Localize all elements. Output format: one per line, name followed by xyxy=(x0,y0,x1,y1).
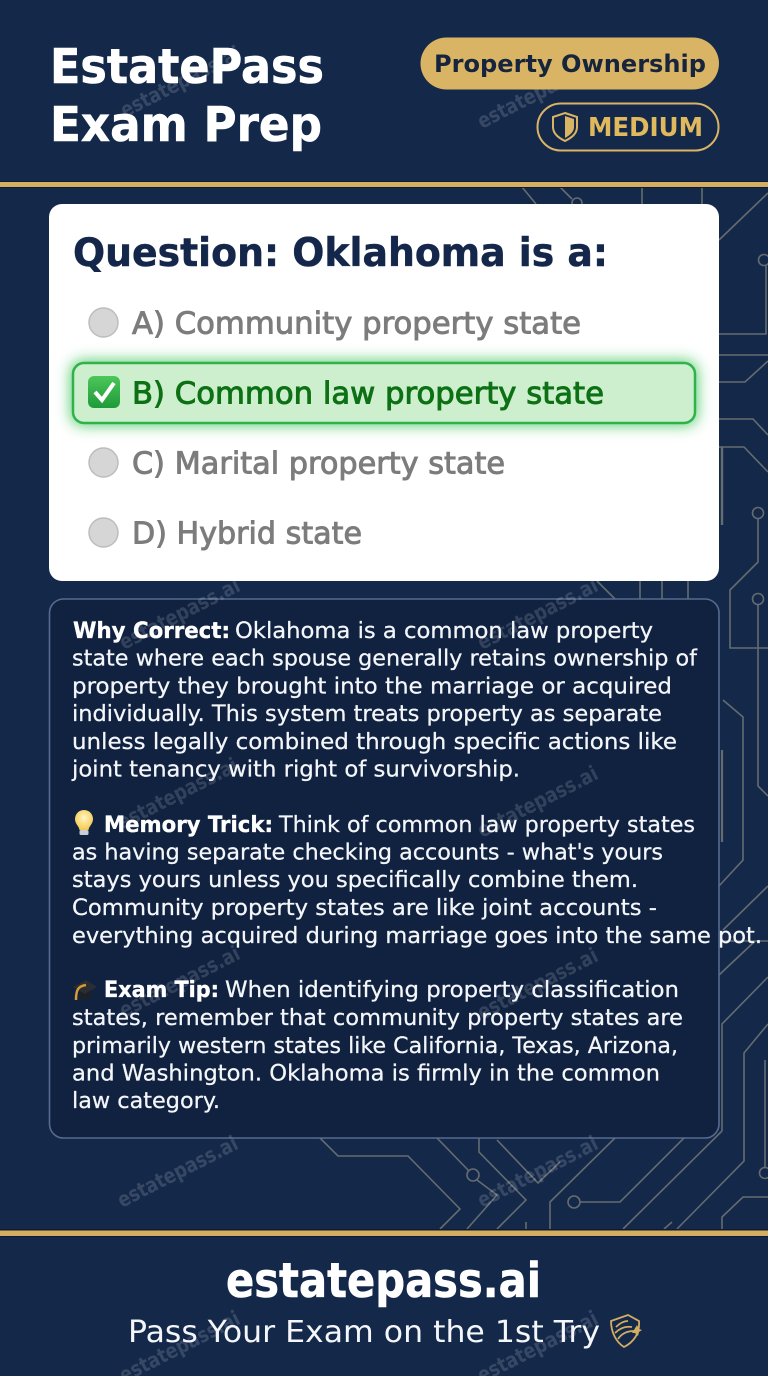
why correct text: state where each spouse generally retains ownership of xyxy=(72,646,698,672)
title xyxy=(50,39,324,153)
difficulty badge: MEDIUM xyxy=(588,113,703,143)
why correct text: unless legally combined through specific actions like xyxy=(72,729,677,755)
exam tip text: Exam Tip: xyxy=(104,977,219,1003)
option C: C) Marital property state xyxy=(132,446,505,482)
memory trick text: as having separate checking accounts - what's yours xyxy=(72,840,663,866)
watermarks: estatepass.ai xyxy=(473,52,602,133)
memory trick text: Memory Trick: xyxy=(104,812,273,838)
question card xyxy=(49,204,719,581)
icon: graduation cap xyxy=(73,980,97,1000)
watermarks: estatepass.ai xyxy=(473,1131,602,1212)
why correct text: individually. This system treats property as separate xyxy=(72,701,662,727)
icon: footer shield xyxy=(611,1315,642,1347)
question heading: Question: Oklahoma is a: xyxy=(73,231,608,276)
watermarks: estatepass.ai xyxy=(473,573,602,654)
circuit board pattern xyxy=(320,187,768,1230)
watermarks: estatepass.ai xyxy=(115,941,244,1022)
icon: check mark xyxy=(88,376,120,408)
exam tip text: primarily western states like California, Texas, Arizona, xyxy=(72,1033,678,1059)
why correct text xyxy=(71,618,698,782)
watermarks: estatepass.ai xyxy=(113,1131,242,1212)
exam tip text: When identifying property classification xyxy=(225,977,679,1003)
difficulty badge xyxy=(538,104,718,150)
memory trick text: everything acquired during marriage goes into the same pot. xyxy=(72,923,762,949)
why correct text: Oklahoma is a common law property xyxy=(235,618,653,644)
icon: light bulb xyxy=(75,810,93,835)
exam tip text: law category. xyxy=(72,1088,220,1114)
exam tip text xyxy=(72,977,683,1114)
option B correct answer xyxy=(70,360,698,426)
watermarks xyxy=(113,41,602,1376)
why correct text: property they brought into the marriage or acquired xyxy=(72,673,672,699)
footer brand: estatepass.ai xyxy=(226,1253,541,1309)
option D: D) Hybrid state xyxy=(132,516,362,552)
footer tagline: Pass Your Exam on the 1st Try xyxy=(128,1315,600,1350)
watermarks: estatepass.ai xyxy=(115,573,244,654)
explanation panel xyxy=(50,599,719,1138)
category pill: Property Ownership xyxy=(434,50,706,78)
memory trick text: stays yours unless you specifically combine them. xyxy=(72,867,638,893)
why correct text: joint tenancy with right of survivorship. xyxy=(71,756,520,782)
footer divider xyxy=(0,1229,768,1237)
header divider xyxy=(0,181,768,188)
option A: A) Community property state xyxy=(132,306,581,342)
why correct text: Why Correct: xyxy=(73,618,230,644)
title: EstatePass xyxy=(50,39,324,95)
memory trick text: Think of common law property states xyxy=(278,812,695,838)
title: Exam Prep xyxy=(50,97,322,153)
option B correct answer: B) Common law property state xyxy=(132,376,604,412)
icon: shield xyxy=(553,113,577,141)
watermarks: estatepass.ai xyxy=(113,753,242,834)
watermarks: estatepass.ai xyxy=(116,41,245,122)
exam tip text: and Washington. Oklahoma is firmly in the common xyxy=(72,1060,660,1086)
memory trick text: Community property states are like joint accounts - xyxy=(72,895,657,921)
memory trick text xyxy=(72,810,762,949)
category pill xyxy=(420,38,719,90)
exam tip text: states, remember that community property states are xyxy=(72,1005,683,1031)
watermarks: estatepass.ai xyxy=(473,761,602,842)
watermarks: estatepass.ai xyxy=(473,943,602,1024)
